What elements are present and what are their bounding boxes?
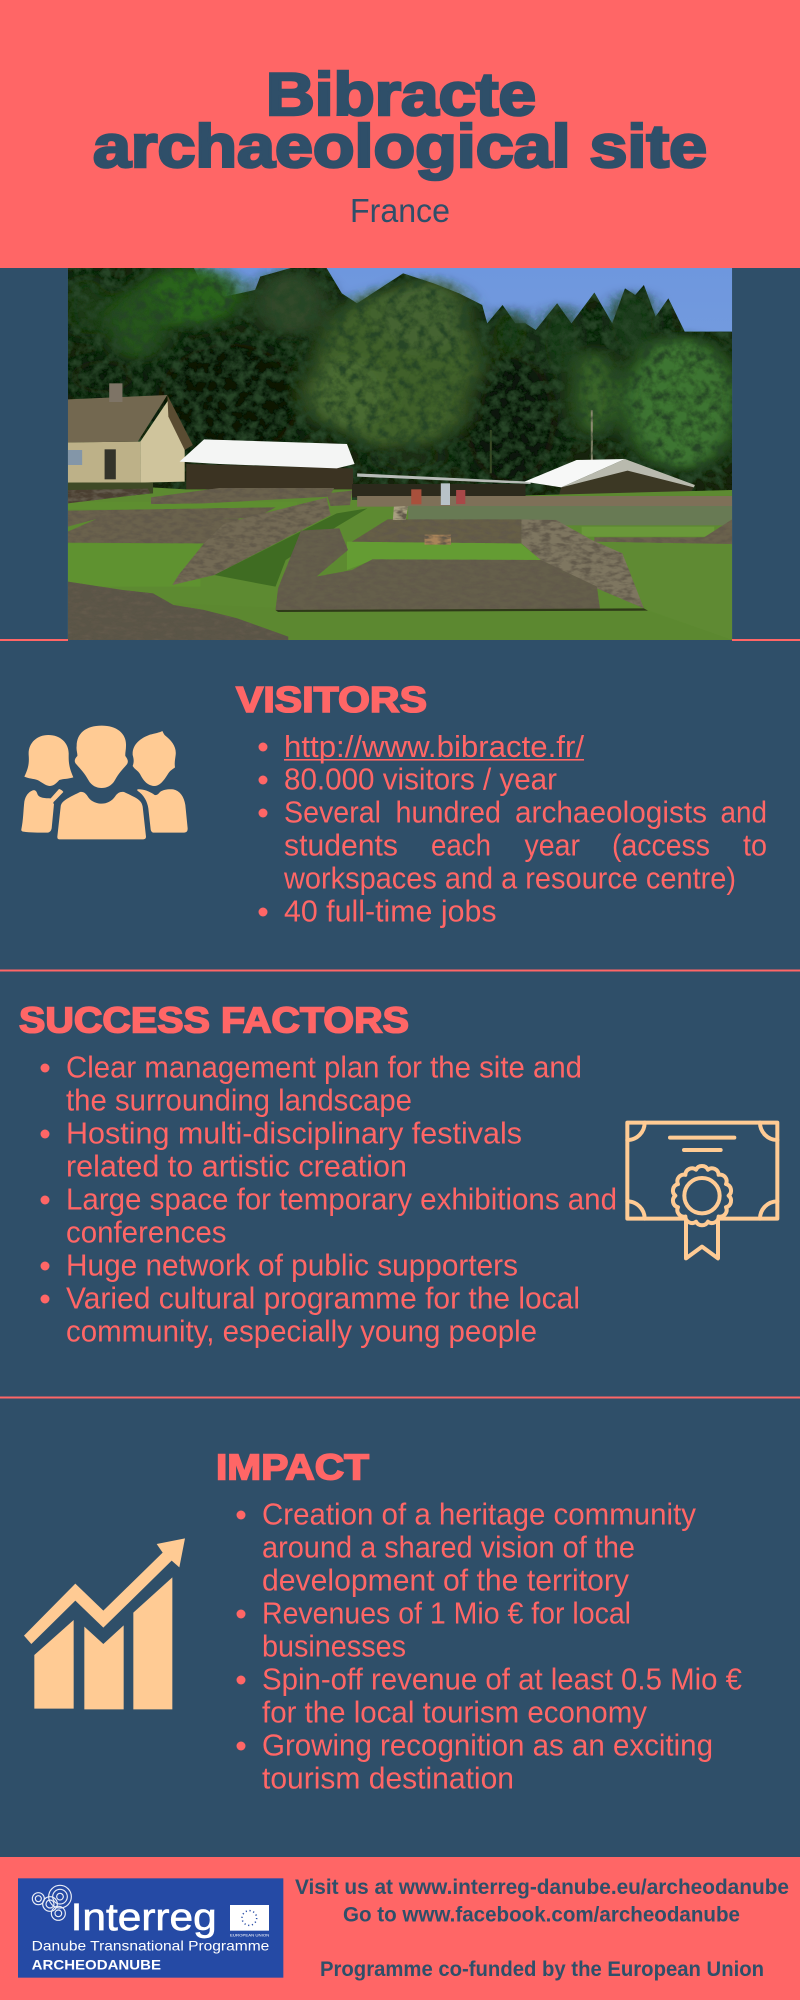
- bullet list: visitors: (access: [612, 828, 710, 862]
- bullet list: impact: Creation of a heritage community: [262, 1498, 697, 1532]
- forest: [66, 267, 740, 500]
- bullet list: visitors: 80.000 visitors / year: [284, 762, 557, 796]
- bullet list: impact: tourism destination: [262, 1762, 514, 1796]
- title: Bibracte: [266, 61, 536, 128]
- footer text: links: Go to www.facebook.com/archeodanube: [343, 1902, 740, 1926]
- bullet list: success factors: [40, 1050, 617, 1348]
- bullet list: success factors: community, especially young people: [66, 1314, 537, 1348]
- bullet list: visitors: [258, 730, 767, 928]
- bullet list: visitors: each: [431, 828, 491, 862]
- logo: Interreg Danube Transnational Programme: [18, 1878, 283, 1978]
- bullet list: impact: around a shared vision of the: [262, 1530, 635, 1564]
- icon: rising bar chart with arrow: [24, 1538, 185, 1709]
- cottage: [68, 383, 193, 483]
- photo: Bibracte excavation site: [66, 267, 740, 640]
- bullet list: visitors: hundred: [396, 796, 501, 830]
- bullet list: success factors: the surrounding landscape: [66, 1084, 412, 1118]
- bullet list: impact: for the local tourism economy: [262, 1696, 648, 1730]
- bullet list: impact: development of the territory: [262, 1564, 630, 1598]
- icon: group of people: [21, 726, 188, 839]
- footer text: links: Programme co-funded by the European Union: [320, 1957, 764, 1981]
- people: [411, 483, 465, 505]
- panel: success factors: [19, 1000, 777, 1348]
- bullet list: visitors: 40 full-time jobs: [284, 894, 496, 928]
- bullet list: visitors: workspaces and a resource centre): [283, 862, 736, 896]
- footer text: links: [295, 1875, 789, 1981]
- bullet list: visitors: year: [524, 828, 580, 862]
- bullet list: visitors: and: [720, 796, 767, 830]
- bullet list: success factors: Hosting multi-disciplinary festivals: [66, 1116, 522, 1150]
- bullet list: impact: Growing recognition as an exciting: [262, 1728, 713, 1762]
- bullet list: impact: Spin-off revenue of at least 0.5 Mio €: [262, 1662, 742, 1696]
- excavation tents: [180, 439, 695, 494]
- bullet list: success factors: conferences: [66, 1216, 226, 1250]
- icon: EU flag: EUROPEAN UNION: [230, 1934, 270, 1938]
- panel: impact: [24, 1446, 742, 1796]
- footer text: links: Visit us at www.interreg-danube.eu/archeodanube: [295, 1875, 789, 1899]
- logo: Interreg Danube Transnational Programme: Interreg: [71, 1897, 217, 1939]
- divider lines: [0, 639, 800, 1398]
- bullet list: success factors: related to artistic creation: [66, 1150, 407, 1184]
- bullet list: success factors: Large space for temporary exhibitions and: [66, 1182, 617, 1216]
- title: [93, 61, 707, 180]
- header band: [0, 0, 800, 268]
- icon: certificate with rosette: [627, 1123, 777, 1258]
- bullet list: visitors: archaeologists: [515, 796, 707, 830]
- footer band: [0, 1857, 800, 2000]
- heading: impact: IMPACT: [216, 1446, 369, 1488]
- bullet list: visitors: to: [743, 828, 767, 862]
- icon: Interreg swirl: [32, 1885, 71, 1920]
- bullet list: impact: Revenues of 1 Mio € for local: [262, 1596, 631, 1630]
- subtitle: France: France: [350, 192, 450, 229]
- logo: Interreg Danube Transnational Programme: Danube Transnational Programme: [32, 1938, 270, 1954]
- stone walls: [68, 488, 732, 640]
- title: archaeological site: [93, 113, 707, 180]
- panel: visitors: [21, 679, 767, 928]
- heading: visitors: VISITORS: [236, 679, 427, 720]
- logo: Interreg Danube Transnational Programme: ARCHEODANUBE: [32, 1956, 161, 1972]
- heading: success factors: SUCCESS FACTORS: [19, 1000, 409, 1040]
- ground: [68, 483, 732, 640]
- bullet list: visitors: Several: [284, 796, 381, 830]
- bullet list: success factors: Clear management plan for the site and: [66, 1050, 582, 1084]
- bullet list: impact: businesses: [262, 1630, 406, 1664]
- bullet list: visitors: http://www.bibracte.fr/: [284, 730, 585, 764]
- bullet list: success factors: Huge network of public supporters: [66, 1248, 518, 1282]
- bullet list: impact: [236, 1498, 742, 1796]
- bullet list: success factors: Varied cultural programme for the local: [66, 1282, 580, 1316]
- icon: EU flag: [230, 1905, 270, 1938]
- bullet list: visitors: students: [284, 828, 398, 862]
